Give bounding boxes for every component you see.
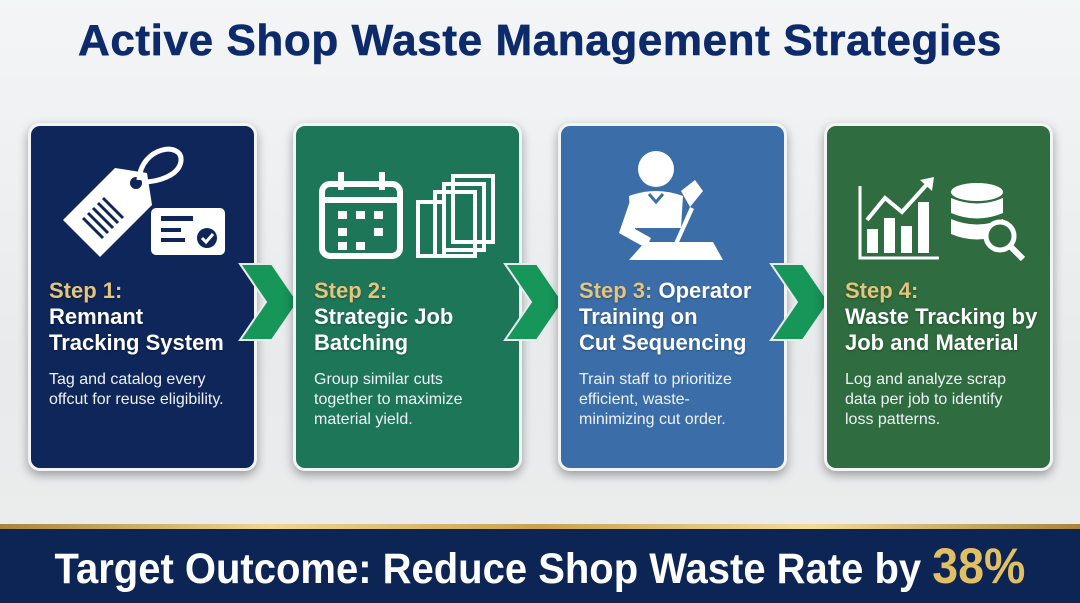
text: step 4: Step 4: [845,278,918,303]
banner: target outcome: Target Outcome: Reduce Shop Waste Rate by 38% [55,538,1025,594]
arrow: 2 to 3 [503,263,558,341]
text: step 4 [844,278,1038,428]
text: step 1: Tracking System [49,330,224,355]
panel: step 3 [558,123,787,471]
text: step 4: Waste Tracking by [845,304,1037,329]
text: step 2: Strategic Job [314,304,453,329]
icon: operator cutting [619,151,723,260]
arrow: 1 to 2 [238,263,293,341]
text: step 4: Job and Material [845,330,1019,355]
text: step 1: Remnant [49,304,143,329]
panel: step 4 [824,123,1053,471]
text: step 1: Step 1: [49,278,122,303]
icon: chart and database [858,177,1026,262]
banner: target outcome [0,529,1080,603]
arrow: 3 to 4 [769,263,824,341]
text: step 1: Tag and catalog every offcut for reuse eligibility. [49,371,224,408]
text: step 2: Step 2: [314,278,387,303]
text: step 3: Cut Sequencing [579,330,746,355]
text: step 3 [578,278,752,428]
text: step 2: Group similar cuts together to maximize material yield. [314,371,463,428]
text: step 1 [49,278,224,408]
text: step 4: Log and analyze scrap data per job to identify loss patterns. [845,371,1006,428]
text: step 2 [314,278,463,428]
text: step 3: Training on [579,304,698,329]
icon: tag and card [63,146,225,257]
text: step 3: Train staff to prioritize efficient, waste-minimizing cut order. [579,371,732,428]
panel: step 2 [293,123,522,471]
icon: calendar and sheets [319,172,495,259]
title: Active Shop Waste Management Strategies [78,16,1002,65]
text: step 3: Step 3: Operator [579,278,751,303]
text: step 2: Batching [314,330,408,355]
panel: step 1 [28,123,257,471]
